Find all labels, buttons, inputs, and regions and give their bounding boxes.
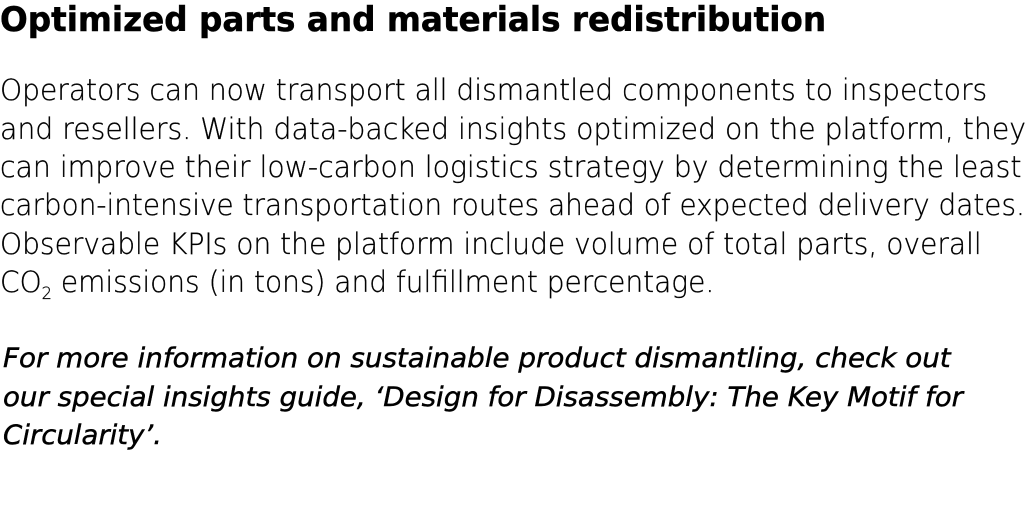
text block: body paragraph: Operators can now transport all dismantled components to inspectors (0, 73, 987, 107)
text block: italic call to action (3, 343, 965, 451)
text block: body paragraph (0, 73, 1026, 304)
text block: body paragraph: can improve their low-carbon logistics strategy by determining the least (0, 150, 1021, 184)
text block: italic call to action: our special insights guide, ‘Design for Disassembly: The Key Motif for (3, 382, 963, 413)
title: Optimized parts and materials redistribution (0, 0, 826, 40)
text block: italic call to action: For more information on sustainable product dismantling, check out (3, 343, 951, 374)
text block: body paragraph: and resellers. With data-backed insights optimized on the platform, they (0, 112, 1026, 146)
text block: body paragraph: carbon-intensive transportation routes ahead of expected delivery dates. (0, 188, 1025, 222)
text block: body paragraph: Observable KPIs on the platform include volume of total parts, overall (0, 227, 982, 261)
text block: body paragraph: CO2 emissions (in tons) and fulfillment percentage. (0, 265, 714, 304)
text block: italic call to action: Circularity’. (3, 420, 162, 451)
